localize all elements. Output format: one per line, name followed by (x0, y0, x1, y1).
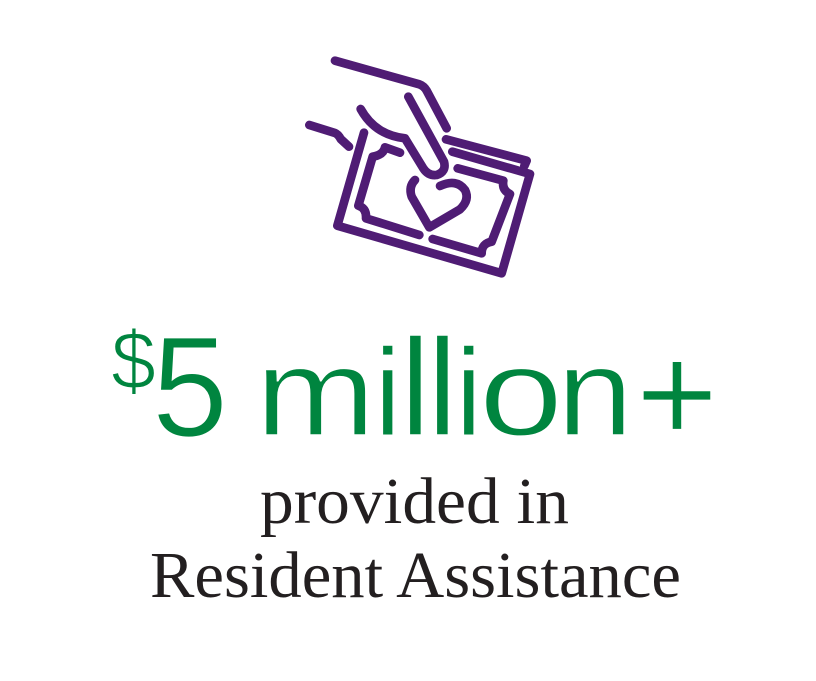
caption line: Resident Assistance: Resident Assistance (150, 539, 681, 612)
word million: l (400, 311, 431, 465)
word million: m (256, 324, 376, 462)
word million: l (427, 311, 458, 465)
word million: n (557, 324, 633, 462)
word million: i (455, 324, 483, 462)
headline: $5 million+ (111, 308, 718, 472)
dollar sign: $ (111, 314, 156, 407)
word million: i (374, 324, 402, 462)
word million: o (479, 324, 563, 462)
numeral 5: 5 (152, 308, 228, 467)
icon: hand placing heart banknote (309, 61, 530, 273)
plus sign: + (636, 315, 718, 472)
caption line: provided in: provided in (260, 465, 569, 538)
